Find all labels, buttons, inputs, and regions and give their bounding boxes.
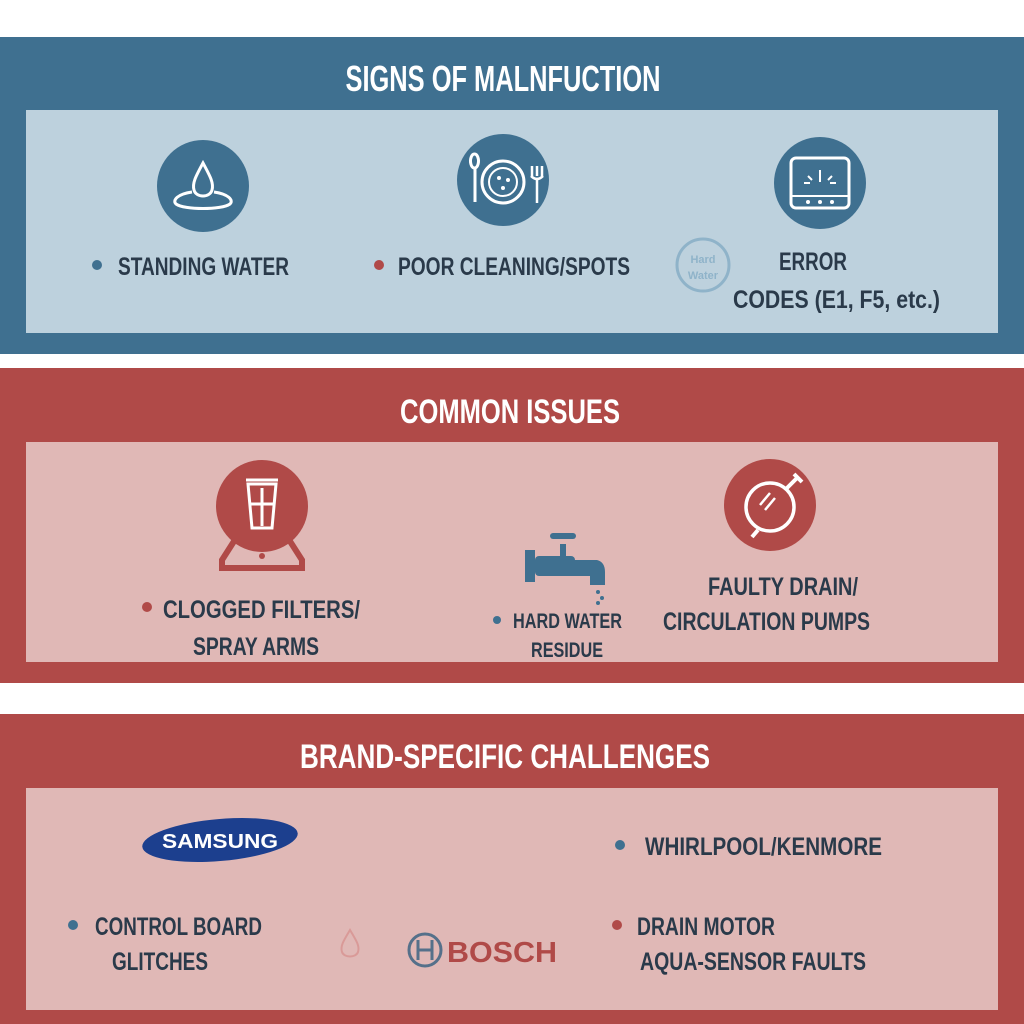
icon: filter [216,460,308,568]
text: poor cleaning: POOR CLEANING/SPOTS [398,253,630,281]
text: faulty pumps: FAULTY DRAIN/ [708,573,858,601]
text: hard water residue: RESIDUE [531,639,603,662]
badge: hard water [677,239,729,291]
panel: signs of malfunction [0,37,1024,354]
icon: plate [457,134,549,226]
text: clogged filters: CLOGGED FILTERS/ [163,596,360,624]
icon: faucet [525,533,605,605]
badge: hard water: Water [688,270,719,282]
text: clogged filters [142,596,360,661]
text: hard water residue: HARD WATER [513,610,622,633]
text: standing water: STANDING WATER [118,253,289,281]
heading: common issues: COMMON ISSUES [400,393,620,431]
text: drain motor [612,913,866,976]
text: drain motor: AQUA-SENSOR FAULTS [640,948,866,976]
logo: samsung [140,812,300,868]
icon: error display [774,137,866,229]
text: whirlpool: WHIRLPOOL/KENMORE [645,833,882,861]
text: clogged filters: SPRAY ARMS [193,633,319,661]
text: error codes [733,248,940,314]
heading: brand-specific: BRAND-SPECIFIC CHALLENGES [300,738,710,776]
logo: samsung: SAMSUNG [162,831,278,853]
text: standing water [92,253,289,281]
text: drain motor: DRAIN MOTOR [637,913,775,941]
panel: brand-specific challenges [0,714,1024,1024]
icon: faint drop [341,930,359,956]
logo: bosch: BOSCH [447,937,557,969]
icon: pump [724,459,816,551]
text: hard water residue [493,610,622,662]
icon: water drop [157,140,249,232]
text: control board: CONTROL BOARD [95,913,262,941]
logo: bosch [409,934,557,969]
text: faulty pumps: CIRCULATION PUMPS [663,608,870,636]
text: error codes: CODES (E1, F5, etc.) [733,286,940,314]
heading: signs of malnfuction: SIGNS OF MALNFUCTION [346,58,660,99]
text: control board: GLITCHES [112,948,208,976]
badge: hard water: Hard [690,254,716,266]
text: control board [68,913,262,976]
panel: common issues [0,368,1024,683]
text: error codes: ERROR [779,248,847,276]
text: faulty pumps [663,573,870,636]
